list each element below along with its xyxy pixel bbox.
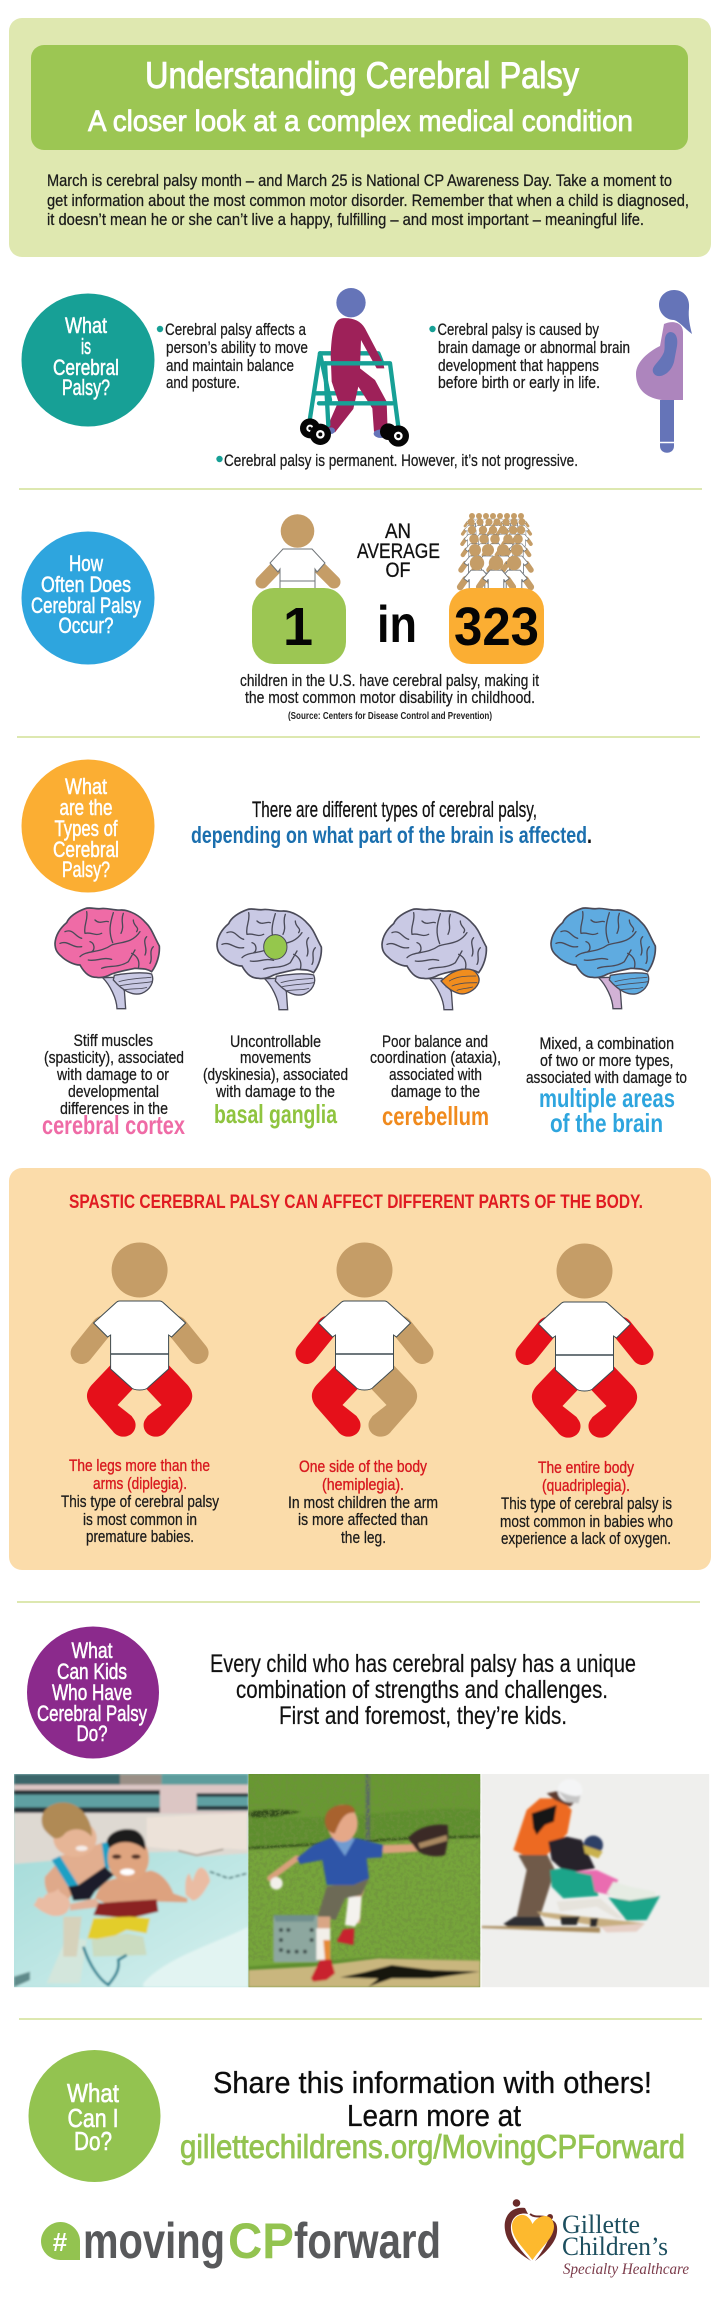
type text: multiple areas: multiple areas [539, 1083, 675, 1113]
photo: swimming [14, 1774, 248, 1987]
main title: Understanding Cerebral Palsy [145, 55, 579, 96]
stat label: an average of [357, 520, 440, 582]
caption: hemiplegia: is more affected than [298, 1510, 428, 1529]
bullet: cause: before birth or early in life. [438, 373, 600, 392]
intro paragraph: it doesn’t mean he or she can’t live a happy, fulfilling – and most important – meaningful life. [47, 210, 644, 229]
hashtag [41, 2213, 441, 2269]
type text: cerebellum: associated with [389, 1066, 482, 1084]
circle heading: how often: How [69, 551, 103, 576]
kids statement: combination of strengths and challenges. [236, 1676, 608, 1704]
stat box: 1 [252, 588, 346, 664]
type text: cerebral cortex: with damage to or [56, 1066, 169, 1084]
bullet: cause: Cerebral palsy is caused by [438, 320, 599, 339]
caption: diplegia [61, 1456, 219, 1546]
type text: multiple areas: Mixed, a combination [540, 1035, 674, 1053]
circle heading: what can I do: Can I [68, 2103, 118, 2133]
hashtag: # [53, 2227, 68, 2257]
subtitle: A closer look at a complex medical condition [88, 105, 633, 138]
caption: diplegia: This type of cerebral palsy [61, 1492, 219, 1511]
panel: spastic cerebral palsy [9, 1168, 711, 1570]
caption: quadriplegia: (quadriplegia). [542, 1476, 630, 1495]
icon: child with walker [300, 288, 409, 447]
stat label: an average of: AVERAGE [357, 540, 440, 563]
stat caption: children in the U.S. have cerebral palsy, making it [240, 671, 539, 690]
type text: multiple areas: of two or more types, [540, 1052, 674, 1070]
section: types [22, 760, 687, 1140]
photo: baseball [248, 1774, 480, 1987]
type text: cerebral cortex [42, 1032, 185, 1140]
type text: cerebral cortex: cerebral cortex [42, 1110, 185, 1140]
circle heading: what is cerebral palsy: Palsy? [62, 375, 110, 400]
bullet: permanent: Cerebral palsy is permanent. However, it’s not progressive. [224, 451, 578, 470]
baby: quadriplegia [526, 1244, 642, 1438]
logo: Gillette Children's: Gillette [562, 2210, 640, 2239]
circle heading: what is cerebral palsy: What [65, 313, 107, 338]
intro paragraph [47, 171, 689, 229]
bullet: affects movement: and maintain balance [166, 356, 294, 375]
type text: cerebral cortex: (spasticity), associated [44, 1049, 184, 1067]
type text: cerebral cortex: Stiff muscles [74, 1032, 153, 1050]
bullet: affects movement [157, 320, 308, 392]
type text: multiple areas [526, 1035, 687, 1138]
kids statement [210, 1650, 636, 1730]
type text: cerebral cortex: differences in the [60, 1100, 168, 1118]
circle heading: types [22, 760, 154, 892]
bullet: cause [429, 320, 630, 392]
type text: cerebellum: damage to the [391, 1083, 480, 1101]
stat box: 323: 323 [454, 597, 539, 657]
circle heading: what can I do: What [67, 2078, 120, 2108]
caption: quadriplegia: experience a lack of oxygen. [501, 1529, 671, 1548]
bullet: affects movement: person’s ability to move [166, 338, 308, 357]
circle heading: what can kids do [27, 1626, 159, 1758]
logo: Gillette Children's: Children’s [562, 2232, 668, 2261]
section: what can I do [28, 2050, 689, 2278]
circle heading: what can I do [28, 2050, 160, 2182]
caption: hemiplegia: One side of the body [299, 1457, 427, 1476]
caption: quadriplegia: The entire body [538, 1458, 634, 1477]
type text: basal ganglia [203, 1033, 348, 1129]
icon: single child [262, 514, 334, 590]
circle heading: what can kids do: Who Have [52, 1680, 132, 1705]
brain: cerebellum [382, 909, 486, 1010]
circle heading: how often: Cerebral Palsy [31, 593, 141, 618]
circle heading: how often: Occur? [58, 613, 114, 638]
type text: basal ganglia: with damage to the [215, 1083, 335, 1101]
stat caption [240, 671, 539, 722]
share call to action: Learn more at [347, 2098, 521, 2133]
grass texture [248, 1774, 480, 1961]
title banner [31, 45, 688, 150]
type text: cerebellum [370, 1033, 501, 1131]
source note: (Source: Centers for Disease Control and Prevention) [288, 710, 492, 722]
hashtag: forward [294, 2213, 441, 2269]
section: how often [22, 513, 544, 722]
type text: basal ganglia: Uncontrollable [230, 1033, 321, 1051]
intro panel [9, 18, 711, 257]
bullet: affects movement: Cerebral palsy affects a [165, 320, 306, 339]
caption: quadriplegia: This type of cerebral palsy is [501, 1494, 672, 1513]
circle heading: how often [22, 532, 154, 664]
types intro [191, 797, 592, 848]
circle heading: what is cerebral palsy: Cerebral [53, 355, 119, 380]
caption: diplegia: The legs more than the [69, 1456, 210, 1475]
caption: hemiplegia [288, 1457, 438, 1547]
bullet: cause: brain damage or abnormal brain [438, 338, 630, 357]
stat word: in: in [377, 596, 417, 654]
hashtag: moving [83, 2213, 225, 2269]
circle heading: how often: Often Does [41, 572, 131, 597]
type text: basal ganglia: movements [240, 1049, 311, 1067]
caption: hemiplegia: (hemiplegia). [322, 1475, 404, 1494]
stat label: an average of: AN [385, 520, 411, 543]
logo: Gillette Children's: Specialty Healthcare [563, 2261, 689, 2278]
brain: cerebral cortex [55, 908, 159, 1009]
type text: cerebellum: Poor balance and [382, 1033, 488, 1051]
caption: diplegia: premature babies. [86, 1527, 194, 1546]
type text: cerebellum: cerebellum [382, 1101, 489, 1131]
stat label: an average of: OF [386, 559, 410, 582]
caption: quadriplegia: most common in babies who [500, 1512, 673, 1531]
types intro: There are different types of cerebral palsy, [252, 797, 537, 822]
share call to action: Share this information with others! [213, 2065, 652, 2100]
circle heading: types: Cerebral [53, 837, 119, 862]
circle heading: what can kids do: Do? [76, 1721, 108, 1746]
circle heading: types: Types of [54, 816, 118, 841]
icon: crowd of children [460, 513, 531, 591]
circle heading: types: Palsy? [62, 857, 110, 882]
brain: basal ganglia [217, 909, 321, 1010]
circle heading: what is cerebral palsy: is [81, 334, 91, 359]
circle heading: types: are the [60, 795, 112, 820]
type text: cerebral cortex: developmental [68, 1083, 159, 1101]
circle heading: what can kids do: Can Kids [57, 1659, 127, 1684]
stat caption: the most common motor disability in childhood. [245, 688, 535, 707]
section: what is cerebral palsy [22, 288, 692, 470]
brain: multiple areas [551, 908, 655, 1009]
type text: basal ganglia: (dyskinesia), associated [203, 1066, 348, 1084]
section: what can kids do [14, 1626, 709, 1987]
circle heading: what can kids do: Cerebral Palsy [37, 1701, 147, 1726]
circle heading: what is cerebral palsy [22, 294, 154, 426]
photo: sit skiing [481, 1774, 709, 1987]
stat box: 1: 1 [283, 597, 313, 657]
circle heading: what can kids do: What [72, 1638, 112, 1663]
type text: multiple areas: of the brain [550, 1108, 663, 1138]
type text: cerebellum: coordination (ataxia), [370, 1049, 501, 1067]
caption: diplegia: is most common in [83, 1510, 197, 1529]
logo: Gillette Children's [505, 2199, 689, 2278]
hashtag: CP [228, 2213, 294, 2269]
kids statement: First and foremost, they’re kids. [279, 1702, 567, 1730]
baby: hemiplegia [306, 1242, 422, 1437]
caption: diplegia: arms (diplegia). [93, 1474, 187, 1493]
type text: multiple areas: associated with damage to [526, 1069, 687, 1087]
icon: pregnant woman [636, 290, 692, 453]
caption: quadriplegia [500, 1458, 673, 1548]
types intro: depending on what part of the brain is affected. [191, 822, 592, 848]
circle heading: what can I do: Do? [74, 2126, 112, 2156]
bullet: affects movement: and posture. [166, 373, 240, 392]
circle heading: types: What [65, 774, 107, 799]
baby: diplegia [82, 1242, 198, 1437]
bullet: cause: development that happens [438, 356, 599, 375]
caption: hemiplegia: the leg. [341, 1528, 386, 1547]
type text: basal ganglia: basal ganglia [214, 1099, 337, 1129]
share call to action [180, 2065, 685, 2165]
caption: hemiplegia: In most children the arm [288, 1493, 438, 1512]
